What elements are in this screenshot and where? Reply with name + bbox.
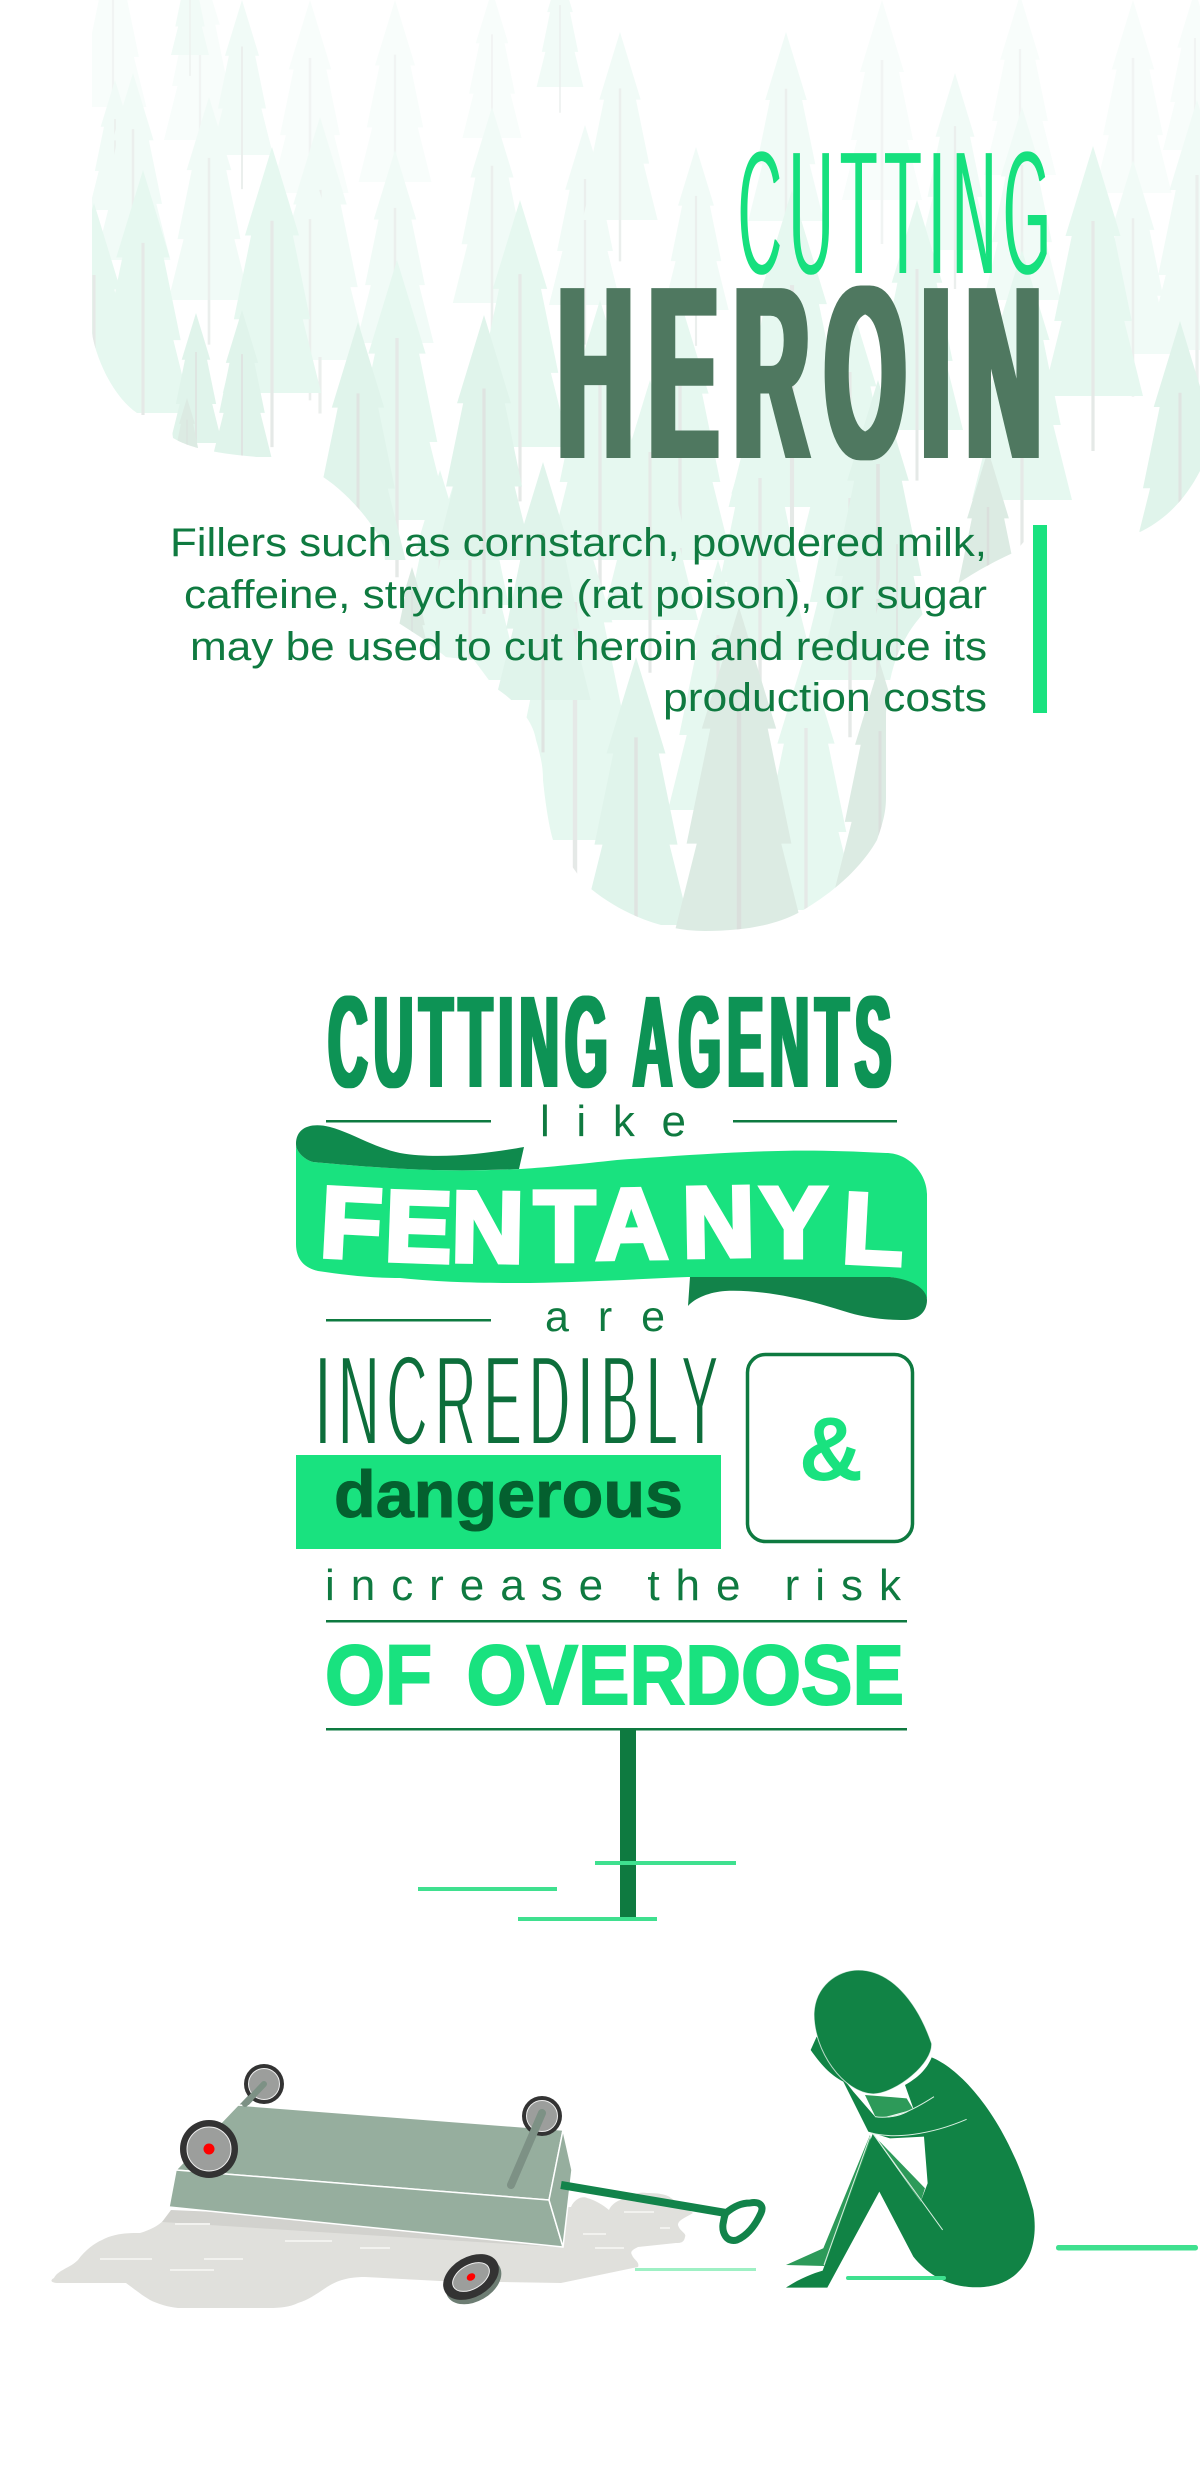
text block: fillers description	[170, 521, 987, 720]
heading: cutting agents: CUTTING AGENTS	[328, 970, 897, 1116]
box: dangerous: dangerous	[334, 1457, 683, 1531]
text: incredibly: INCREDIBLY	[315, 1330, 726, 1473]
wheel: front large	[180, 2120, 238, 2178]
chest highlight	[865, 2095, 913, 2119]
text: of overdose with rules: OF OVERDOSE	[325, 1628, 904, 1722]
wagon body	[169, 2105, 572, 2247]
title: cutting: CUTTING	[738, 113, 1058, 314]
panel: forest background	[92, 0, 1200, 931]
text block: fillers description: Fillers such as cornstarch, powdered milk,	[170, 521, 987, 565]
ground lines	[418, 1861, 736, 1921]
text block: fillers description: production costs	[663, 676, 987, 720]
light ground line	[635, 2268, 756, 2271]
puddle dashes	[100, 2212, 670, 2270]
text: increase the risk: increase the risk	[325, 1561, 902, 1610]
banner: fentanyl ribbon	[296, 1125, 927, 1320]
box: ampersand: &	[799, 1400, 863, 1500]
back-left axle	[222, 2084, 264, 2128]
head	[814, 1970, 932, 2094]
illustration: seated despairing person	[786, 1970, 1035, 2288]
box: ampersand	[748, 1354, 912, 1542]
accent bar	[1033, 525, 1047, 713]
wheel: back right with axle	[511, 2096, 562, 2185]
far leg	[786, 2135, 872, 2266]
body and near leg	[786, 2037, 1035, 2288]
wheel: loose	[435, 2245, 509, 2314]
ground lines near person	[846, 2245, 1198, 2280]
illustration: overturned wagon	[51, 2064, 762, 2314]
box: dangerous	[296, 1455, 721, 1549]
spilled puddle	[51, 2193, 693, 2308]
wheel: back left	[244, 2064, 284, 2104]
thigh highlight	[878, 2140, 925, 2202]
text block: fillers description: may be used to cut heroin and reduce its	[190, 625, 987, 669]
sign pole	[620, 1730, 636, 1920]
title: heroin: HEROIN	[558, 236, 1057, 511]
text: are with rule: are	[545, 1293, 665, 1341]
text: fentanyl: FENTANYL	[318, 1166, 907, 1287]
wagon handle	[561, 2185, 762, 2241]
text: like with rules: like	[540, 1097, 686, 1146]
wagon shadow	[162, 2210, 556, 2247]
arm outlines	[824, 2097, 967, 2265]
text block: fillers description: caffeine, strychnine (rat poison), or sugar	[184, 573, 987, 617]
